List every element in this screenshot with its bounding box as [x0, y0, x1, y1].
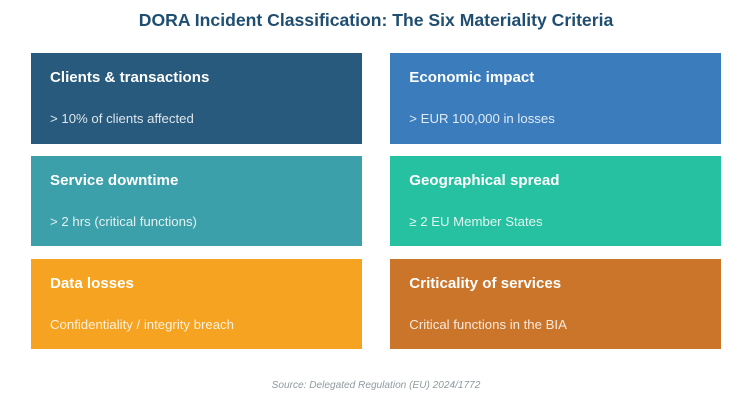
text: downtime threshold: > 2 hrs (critical functions) [50, 214, 197, 229]
panel: economic impact [390, 53, 721, 144]
panel: service downtime [31, 156, 362, 246]
text: clients threshold: > 10% of clients affected [50, 111, 194, 126]
title: DORA Incident Classification: The Six Materiality Criteria [139, 10, 613, 30]
heading: clients and transactions: Clients & transactions [50, 69, 209, 86]
panel: clients and transactions [31, 53, 362, 144]
text: economic threshold: > EUR 100,000 in losses [409, 111, 555, 126]
source note: Source: Delegated Regulation (EU) 2024/1772 [272, 380, 480, 391]
text: criticality criterion: Critical functions in the BIA [409, 317, 567, 332]
heading: geographical spread: Geographical spread [409, 172, 559, 189]
text: data losses criterion: Confidentiality / integrity breach [50, 317, 234, 332]
heading: service downtime: Service downtime [50, 172, 178, 189]
panel: criticality of services [390, 259, 721, 349]
panel: geographical spread [390, 156, 721, 246]
heading: data losses: Data losses [50, 275, 134, 292]
panel: data losses [31, 259, 362, 349]
heading: economic impact: Economic impact [409, 69, 534, 86]
text: geographical threshold: ≥ 2 EU Member States [409, 214, 543, 229]
heading: criticality of services: Criticality of services [409, 275, 561, 292]
